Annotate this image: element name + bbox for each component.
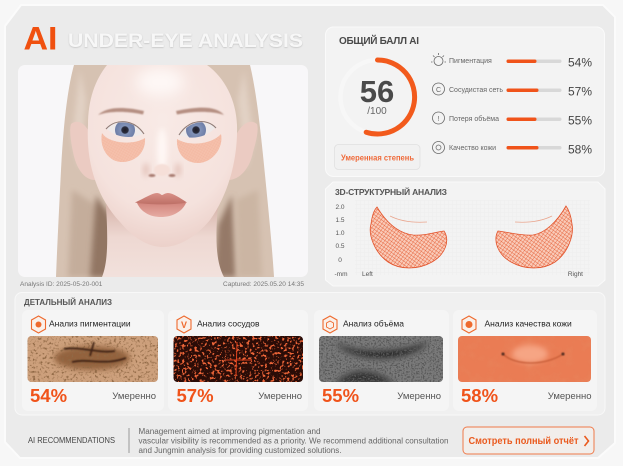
metric: vascular network xyxy=(432,83,592,98)
left eye mesh: Left xyxy=(362,271,373,278)
axis labels: 1.5 xyxy=(335,217,345,224)
card: pigmentation: Умеренно xyxy=(112,391,156,402)
neck xyxy=(102,205,224,277)
card: pigmentation: 54% xyxy=(30,385,67,406)
nose xyxy=(143,128,181,177)
score ring xyxy=(340,60,415,134)
metric: pigmentation: Пигментация xyxy=(449,58,492,65)
left eye mesh xyxy=(362,207,447,278)
metric: volume loss: ! xyxy=(438,116,440,123)
metric: skin quality xyxy=(432,142,592,156)
under-eye patch right xyxy=(177,134,221,163)
portrait photo xyxy=(18,65,308,277)
forehead highlight xyxy=(136,68,184,96)
heading: ОБЩИЙ БАЛЛ AI xyxy=(339,34,419,47)
panel: detailed analysis xyxy=(15,292,605,415)
title xyxy=(24,20,303,56)
right eye mesh xyxy=(496,206,583,278)
metric: vascular network: Сосудистая сеть xyxy=(449,87,503,94)
metric: pigmentation: 54% xyxy=(568,56,592,70)
axis labels: 1.0 xyxy=(335,230,345,237)
face xyxy=(88,65,237,247)
score ring: 56 xyxy=(360,74,394,109)
heading: ДЕТАЛЬНЫЙ АНАЛИЗ xyxy=(24,298,112,307)
title: UNDER-EYE ANALYSIS xyxy=(68,30,303,52)
card: volume xyxy=(319,315,443,402)
eyes xyxy=(106,121,216,138)
title: AI xyxy=(24,20,58,56)
card: vessels: Анализ сосудов xyxy=(197,318,260,328)
metric: volume loss: Потеря объёма xyxy=(449,115,499,123)
photo captions: Analysis ID: 2025-05-20-001 xyxy=(20,281,103,288)
view full report button xyxy=(463,427,594,454)
card: volume: Умеренно xyxy=(397,391,441,402)
panel: 3D structural analysis xyxy=(326,182,605,286)
view full report button: Смотреть полный отчёт xyxy=(468,435,578,447)
metric: pigmentation xyxy=(431,53,592,70)
axis labels: -mm xyxy=(334,271,348,278)
icon: hexagon leaf xyxy=(32,316,46,333)
divider xyxy=(128,428,130,453)
panel: overall AI score xyxy=(326,27,604,176)
pigmentation texture xyxy=(27,336,159,382)
heading: 3D-СТРУКТУРНЫЙ АНАЛИЗ xyxy=(335,186,447,197)
card: pigmentation xyxy=(28,315,158,402)
card: skin quality: Анализ качества кожи xyxy=(484,318,572,328)
icon: hexagon V: V xyxy=(181,320,187,330)
metric: skin quality: Качество кожи xyxy=(449,145,496,152)
volume texture xyxy=(319,336,443,384)
metric: skin quality: 58% xyxy=(568,142,592,156)
recommendation text xyxy=(138,427,448,455)
axis labels: 2.0 xyxy=(335,204,345,211)
recommendation text: vascular visibility is recommended as a priority. We recommend additional consultation xyxy=(138,436,448,446)
severity badge xyxy=(334,144,420,170)
severity badge: Умеренная степень xyxy=(341,152,414,162)
axis labels: 0 xyxy=(338,257,342,264)
hair xyxy=(56,65,274,277)
metric: vascular network: 57% xyxy=(568,84,592,98)
card: pigmentation: Анализ пигментации xyxy=(49,318,131,328)
ears xyxy=(70,122,258,180)
vessel texture xyxy=(173,336,304,382)
card: volume: Анализ объёма xyxy=(343,318,404,328)
photo captions: Captured: 2025.05.20 14:35 xyxy=(223,281,304,288)
axis labels: 0.5 xyxy=(335,243,345,250)
card: skin quality xyxy=(458,315,592,402)
card: vessels: Умеренно xyxy=(258,391,302,402)
card: vessels xyxy=(174,315,303,402)
under-eye patch left xyxy=(101,133,145,162)
photo captions xyxy=(20,281,304,288)
card: volume: 55% xyxy=(322,385,359,406)
card: vessels: 57% xyxy=(176,385,214,406)
icon: hexagon texture xyxy=(462,316,476,333)
eyebrows xyxy=(98,108,224,115)
metric: volume loss xyxy=(432,112,592,128)
metric: vascular network: C xyxy=(436,87,441,94)
right eye mesh: Right xyxy=(568,271,583,278)
icon: hexagon cube xyxy=(323,316,337,333)
AI recommendations label: AI RECOMMENDATIONS xyxy=(28,435,115,445)
skin texture xyxy=(458,336,591,382)
recommendation text: and Jungmin analysis for providing customized solutions. xyxy=(138,446,342,455)
card: skin quality: Умеренно xyxy=(548,391,592,402)
axis labels xyxy=(334,204,348,278)
chart grid xyxy=(355,200,590,275)
lips xyxy=(135,193,187,217)
card: skin quality: 58% xyxy=(461,385,498,406)
metric: volume loss: 55% xyxy=(568,114,592,128)
score ring: /100 xyxy=(367,106,387,117)
recommendation text: Management aimed at improving pigmentation and xyxy=(138,427,320,436)
